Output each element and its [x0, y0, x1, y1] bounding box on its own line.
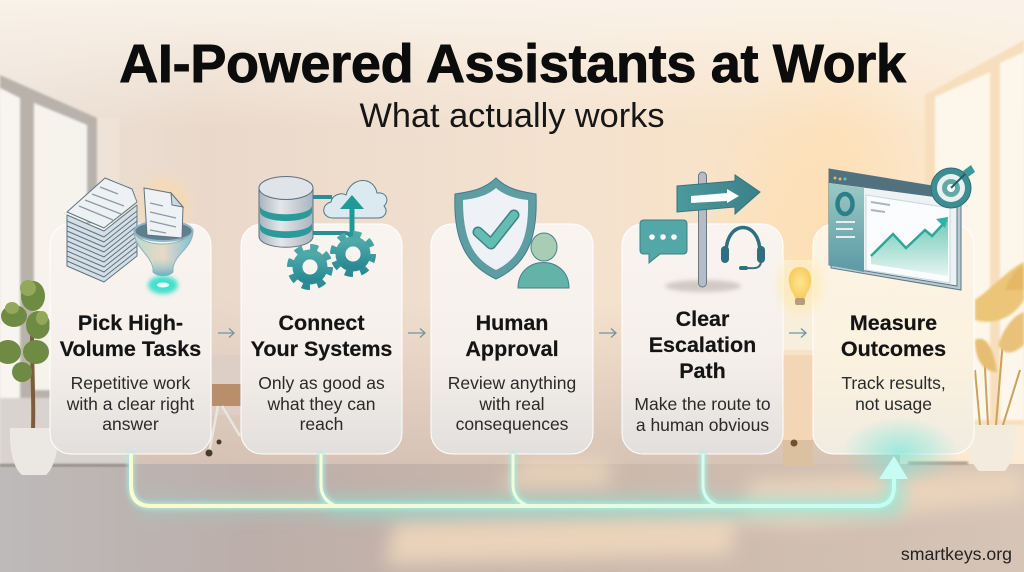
description: step 1: answer	[102, 414, 159, 434]
footer: source: smartkeys.org	[901, 544, 1012, 564]
icon: light bulb	[778, 257, 822, 313]
description: step 4: a human obvious	[636, 414, 769, 434]
description: step 3: consequences	[456, 414, 568, 434]
heading: step 1: Volume Tasks	[60, 337, 201, 361]
description: step 4	[634, 394, 771, 434]
panel: card 2 background	[241, 224, 402, 454]
plant: left	[0, 280, 58, 475]
icon: database, cloud and gears	[259, 176, 387, 287]
icon: documents and funnel	[67, 177, 193, 294]
description: step 2: Only as good as	[258, 373, 385, 393]
arrow: glowing flow line to outcomes	[131, 455, 908, 506]
description: step 5	[841, 373, 946, 414]
subtitle: What actually works	[360, 97, 664, 135]
panel: card 3 background	[431, 224, 593, 454]
panel: card 1 background	[50, 224, 211, 454]
heading: step 4	[649, 307, 756, 383]
card 4 text	[634, 307, 771, 434]
title: AI-Powered Assistants at Work	[119, 34, 906, 94]
description: step 3: with real	[479, 394, 545, 414]
description: step 1: Repetitive work	[71, 373, 190, 393]
heading: step 3: Approval	[465, 337, 559, 361]
description: step 1: with a clear right	[67, 394, 194, 414]
heading: step 5: Measure	[850, 311, 937, 335]
icon: shield with check and person	[455, 178, 569, 288]
description: step 1	[66, 373, 194, 434]
panels	[50, 224, 974, 454]
panel: card 4 background	[622, 224, 783, 454]
heading: step 3: Human	[476, 311, 548, 335]
description: step 3	[448, 373, 576, 434]
heading: step 1	[60, 311, 201, 361]
description: step 2: reach	[300, 414, 343, 434]
card 5 text	[841, 311, 946, 414]
card 1 text	[60, 311, 201, 434]
panel: card 5 background	[813, 224, 974, 454]
heading: step 2	[250, 311, 392, 361]
heading: step 4: Clear	[676, 307, 729, 331]
description: step 2: what they can	[268, 394, 375, 414]
heading: step 2: Your Systems	[251, 337, 392, 361]
glow path behind connector	[140, 470, 900, 507]
description: step 2	[258, 373, 385, 434]
floor light patches	[385, 457, 1024, 565]
heading: step 1: Pick High-	[78, 311, 183, 335]
right window	[908, 40, 1024, 464]
arrow: step connectors between cards	[218, 328, 806, 338]
heading: step 4: Escalation	[649, 333, 756, 357]
description: step 5: not usage	[855, 394, 932, 414]
heading: step 4: Path	[679, 359, 726, 383]
card 3 text	[448, 311, 576, 434]
heading: step 5: Outcomes	[841, 337, 946, 361]
left window	[0, 75, 130, 466]
description: step 4: Make the route to	[634, 394, 771, 414]
description: step 5: Track results,	[841, 373, 946, 393]
heading: step 2: Connect	[278, 311, 364, 335]
icon: dashboard with target	[829, 165, 975, 290]
plant: right	[967, 262, 1024, 471]
heading: step 3	[465, 311, 559, 361]
card 2 text	[250, 311, 392, 434]
icon: signpost, chat bubble and headset	[640, 172, 765, 292]
background furniture	[206, 260, 813, 466]
heading: step 5	[841, 311, 946, 361]
description: step 3: Review anything	[448, 373, 576, 393]
